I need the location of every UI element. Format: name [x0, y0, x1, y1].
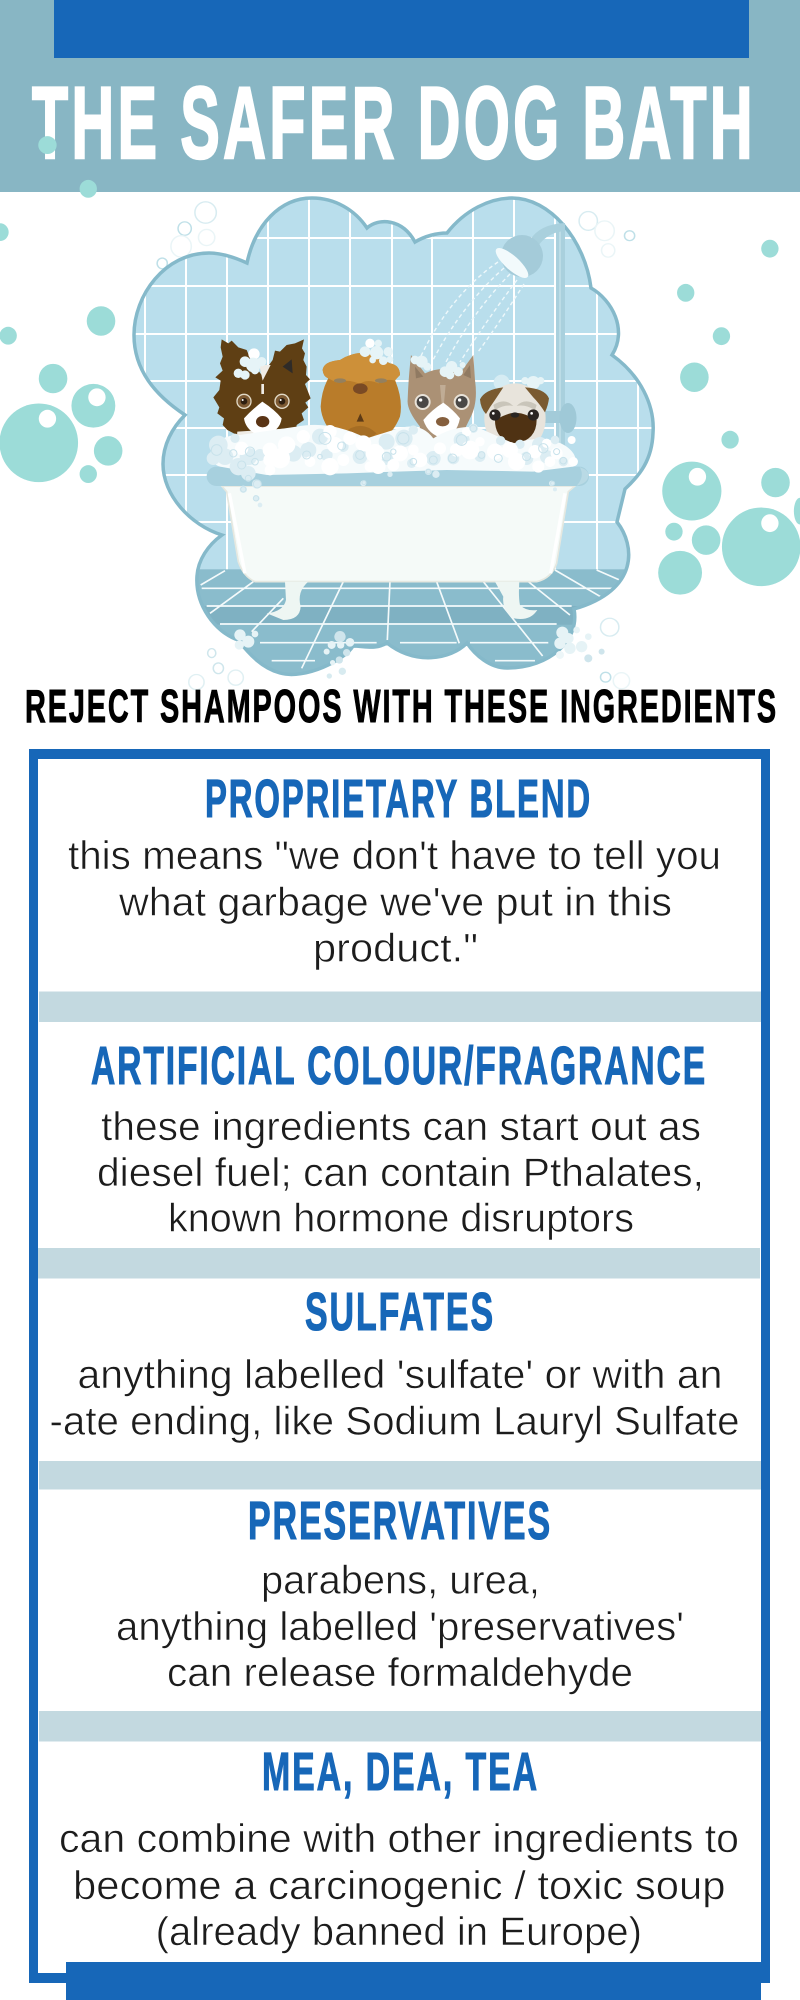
shower knob	[545, 411, 565, 423]
dog: shar pei	[321, 339, 401, 450]
body text: known hormone disruptors	[168, 1196, 634, 1240]
heading: PRESERVATIVES	[248, 1491, 552, 1551]
bathtub	[207, 467, 589, 620]
heading: SULFATES	[305, 1282, 495, 1342]
soap on head	[234, 348, 266, 380]
section: proprietary blend	[68, 769, 721, 971]
soap behind pug	[494, 375, 544, 391]
body text: product."	[313, 927, 478, 971]
body text: this means "we don't have to tell you	[68, 834, 721, 878]
shower	[420, 223, 576, 446]
tile grid	[125, 190, 665, 575]
body text: these ingredients can start out as	[101, 1105, 701, 1149]
floor foam clusters	[234, 627, 605, 679]
dog: long-haired brown	[213, 339, 311, 447]
shower head	[501, 235, 543, 277]
divider bars	[38, 992, 761, 1742]
cloud outline	[134, 198, 653, 674]
pale bubbles	[207, 424, 568, 507]
section: artificial colour/fragrance	[91, 1036, 707, 1240]
shower water	[420, 262, 524, 362]
tub feet	[267, 582, 308, 620]
body text: can combine with other ingredients to	[59, 1817, 739, 1861]
dogs and foam	[207, 339, 589, 620]
section: sulfates	[50, 1282, 740, 1443]
faint bubbles around cloud	[157, 202, 635, 690]
bath illustration	[125, 190, 680, 690]
body text: anything labelled 'sulfate' or with an	[78, 1353, 722, 1397]
body text	[68, 834, 721, 971]
dog: tan terrier	[408, 355, 476, 446]
foam mass	[210, 425, 576, 475]
body text: anything labelled 'preservatives'	[116, 1605, 684, 1649]
body text: diesel fuel; can contain Pthalates,	[97, 1151, 704, 1195]
bubbles: right	[658, 240, 800, 595]
cloud wall and floor	[136, 200, 652, 673]
body text: parabens, urea,	[261, 1558, 540, 1602]
body text: what garbage we've put in this	[118, 880, 672, 924]
body text: can release formaldehyde	[167, 1651, 633, 1695]
section: preservatives	[116, 1491, 684, 1695]
soap on head	[360, 339, 393, 365]
bubbles: left	[0, 136, 122, 483]
header band	[0, 0, 800, 192]
section: mea, dea, tea	[59, 1742, 739, 1954]
white bubbles	[235, 425, 578, 475]
soap on head	[411, 356, 466, 379]
heading: MEA, DEA, TEA	[262, 1742, 539, 1802]
tub rim	[207, 467, 589, 486]
shower pole	[556, 226, 565, 446]
body text	[50, 1353, 740, 1443]
floor	[198, 569, 624, 673]
bubble rims	[211, 425, 567, 501]
body text: -ate ending, like Sodium Lauryl Sulfate	[50, 1399, 740, 1443]
body text: become a carcinogenic / toxic soup	[73, 1864, 726, 1908]
dog: pug	[480, 375, 549, 453]
body text	[59, 1817, 739, 1954]
footer blue bar	[66, 1962, 761, 2000]
ingredients panel frame	[29, 749, 770, 1983]
body text: (already banned in Europe)	[156, 1910, 642, 1954]
body text	[116, 1558, 684, 1695]
header blue bar	[54, 0, 749, 58]
body text	[97, 1105, 704, 1240]
foam	[207, 424, 578, 507]
